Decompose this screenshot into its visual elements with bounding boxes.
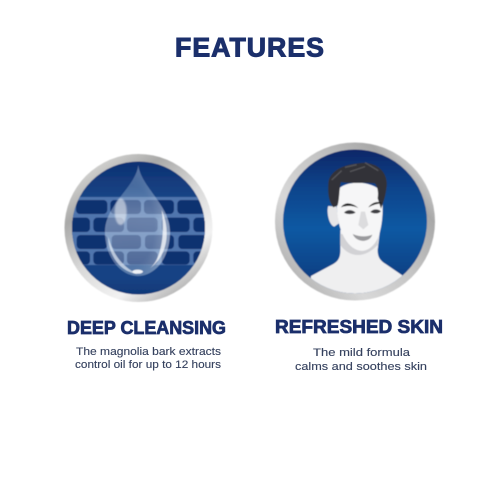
heading: deep cleansing: DEEP CLEANSING bbox=[67, 318, 226, 338]
icon: refreshed skin man portrait bbox=[275, 142, 435, 303]
metal ring bbox=[64, 154, 212, 302]
title: FEATURES bbox=[175, 32, 325, 62]
blue disc with bricks bbox=[72, 161, 206, 296]
text: deep cleansing description: control oil for up to 12 hours bbox=[75, 359, 221, 371]
text: deep cleansing description bbox=[75, 346, 221, 371]
man bbox=[308, 163, 405, 303]
text: refreshed skin description bbox=[295, 347, 427, 373]
text: deep cleansing description: The magnolia bark extracts bbox=[76, 346, 221, 358]
blue disc bbox=[283, 150, 427, 294]
text: refreshed skin description: calms and soothes skin bbox=[295, 361, 427, 373]
heading: refreshed skin: REFRESHED SKIN bbox=[275, 317, 443, 337]
icon: deep cleansing water drop on skin cells bbox=[64, 154, 212, 302]
text: refreshed skin description: The mild formula bbox=[313, 347, 410, 359]
metal ring bbox=[275, 142, 435, 300]
water drop bbox=[105, 165, 170, 276]
